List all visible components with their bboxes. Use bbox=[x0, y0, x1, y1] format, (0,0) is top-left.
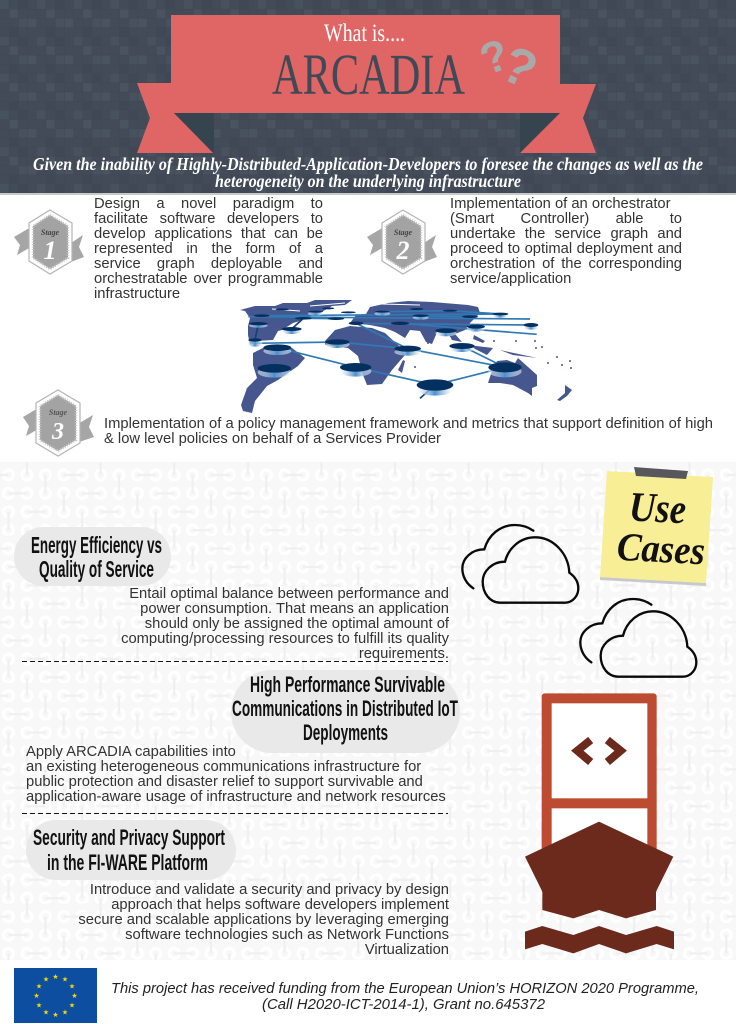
subtitle: heterogeneity on the underlying infrastructure bbox=[215, 171, 521, 191]
heading: What is: What is.... bbox=[324, 20, 405, 47]
divider one bbox=[22, 661, 448, 662]
icon: question marks: ? bbox=[473, 30, 516, 85]
icon: EU flag: ★ bbox=[33, 992, 40, 1000]
icon: question marks: ? bbox=[493, 35, 546, 101]
icon: sticky note use cases: Use bbox=[628, 484, 687, 533]
heading pill: energy efficiency bbox=[14, 527, 171, 586]
text block: stage 1: facilitate software developers to bbox=[94, 211, 323, 227]
text block: high performance: an existing heterogeneous communications infrastructure for bbox=[26, 759, 421, 775]
text block: security and privacy: approach that helps software developers implement bbox=[111, 897, 449, 913]
text block: stage 2 bbox=[450, 196, 682, 287]
text block: stage 1 bbox=[94, 196, 323, 302]
text block: security and privacy bbox=[78, 882, 449, 958]
text block: stage 3 bbox=[104, 416, 713, 447]
icon: stage 2 badge: 2 bbox=[396, 236, 410, 265]
icon: cloud lower bbox=[579, 598, 698, 678]
icon: EU flag: ★ bbox=[69, 982, 75, 990]
text block: security and privacy: Virtualization bbox=[365, 942, 449, 958]
icon: EU flag: ★ bbox=[69, 1002, 75, 1010]
text block: stage 2: Implementation of an orchestrator bbox=[450, 196, 671, 212]
icon: EU flag: ★ bbox=[36, 1002, 42, 1010]
text block: stage 1: develop applications that can be bbox=[94, 226, 323, 242]
icon: stage 3 badge: 3 bbox=[51, 419, 64, 445]
text block: stage 2: service/application bbox=[450, 271, 571, 287]
heading pill: high performance: Deployments bbox=[303, 720, 388, 745]
icon: EU flag: ★ bbox=[62, 1008, 68, 1016]
panel: use cases patterned background bbox=[0, 462, 736, 960]
footer funding text: (Call H2020-ICT-2014-1), Grant no.645372 bbox=[262, 997, 545, 1013]
text block: energy efficiency: should only be assigned the optimal amount of bbox=[145, 616, 449, 632]
text block: stage 1: infrastructure bbox=[94, 286, 180, 302]
chart: world network map bbox=[240, 300, 572, 413]
icon: stage 1 badge: Stage bbox=[41, 228, 60, 237]
text block: energy efficiency: Entail optimal balance between performance and bbox=[129, 586, 449, 602]
divider two bbox=[22, 813, 448, 814]
text block: stage 2: undertake the service graph and bbox=[450, 226, 682, 242]
panel: dark header background bbox=[0, 0, 736, 195]
icon: question marks bbox=[473, 30, 546, 101]
icon: EU flag: ★ bbox=[62, 976, 68, 984]
icon: EU flag: ★ bbox=[52, 1011, 59, 1019]
title ribbon bbox=[137, 15, 596, 153]
heading: ARCADIA: ARCADIA bbox=[272, 42, 465, 107]
icon: stage 2 badge bbox=[367, 209, 437, 275]
text block: high performance: public protection and disaster relief to support survivable and bbox=[26, 774, 423, 790]
text block: security and privacy: secure and scalable applications by leveraging emerging bbox=[78, 912, 449, 928]
text block: stage 2: orchestration of the corresponding bbox=[450, 256, 682, 272]
text block: stage 1: represented in the form of a bbox=[94, 241, 323, 257]
icon: EU flag: ★ bbox=[36, 982, 42, 990]
icon: EU flag: ★ bbox=[52, 973, 59, 981]
text block: energy efficiency: computing/processing resources to fulfill its quality bbox=[121, 631, 449, 647]
text block: stage 3: Implementation of a policy management framework and metrics that support definition of high bbox=[104, 416, 713, 432]
text block: stage 1: Design a novel paradigm to bbox=[94, 196, 323, 212]
text block: high performance: application-aware usage of infrastructure and network resources bbox=[26, 789, 446, 805]
icon: stage 1 badge bbox=[14, 209, 84, 275]
footer funding text bbox=[111, 981, 699, 1013]
text block: stage 2: (Smart Controller) able to bbox=[450, 211, 682, 227]
icon: stage 2 badge: Stage bbox=[394, 228, 413, 237]
text block: energy efficiency: power consumption. That means an application bbox=[140, 601, 449, 617]
text block: energy efficiency: requirements. bbox=[359, 646, 449, 662]
text block: stage 1: orchestratable over programmable bbox=[94, 271, 323, 287]
text block: stage 1: service graph deployable and bbox=[94, 256, 323, 272]
icon: stage 3 badge: Stage bbox=[49, 408, 68, 417]
text block: security and privacy: software technologies such as Network Functions bbox=[125, 927, 449, 943]
icon: boat with code window bbox=[525, 693, 674, 954]
text block: high performance bbox=[26, 744, 446, 805]
icon: EU flag: ★ bbox=[43, 976, 49, 984]
icon: sticky note use cases: Cases bbox=[616, 524, 706, 573]
icon: sticky note use cases bbox=[600, 467, 713, 586]
text block: stage 2: proceed to optimal deployment and bbox=[450, 241, 682, 257]
text block: stage 3: & low level policies on behalf of a Services Provider bbox=[104, 431, 441, 447]
footer funding text: This project has received funding from the European Union’s HORIZON 2020 Programme, bbox=[111, 981, 699, 997]
icon: EU flag: ★ bbox=[71, 992, 78, 1000]
heading pill: security and privacy bbox=[26, 820, 236, 880]
heading pill: high performance bbox=[231, 670, 460, 753]
text block: high performance: Apply ARCADIA capabilities into bbox=[26, 744, 236, 760]
icon: stage 1 badge: 1 bbox=[44, 236, 56, 265]
icon: stage 3 badge bbox=[23, 389, 94, 457]
icon: EU flag: ★ bbox=[43, 1008, 49, 1016]
text block: energy efficiency bbox=[121, 586, 449, 662]
icon: cloud upper bbox=[461, 524, 580, 604]
icon: EU flag bbox=[14, 968, 97, 1023]
text block: security and privacy: Introduce and validate a security and privacy by design bbox=[90, 882, 449, 898]
subtitle bbox=[33, 154, 703, 191]
